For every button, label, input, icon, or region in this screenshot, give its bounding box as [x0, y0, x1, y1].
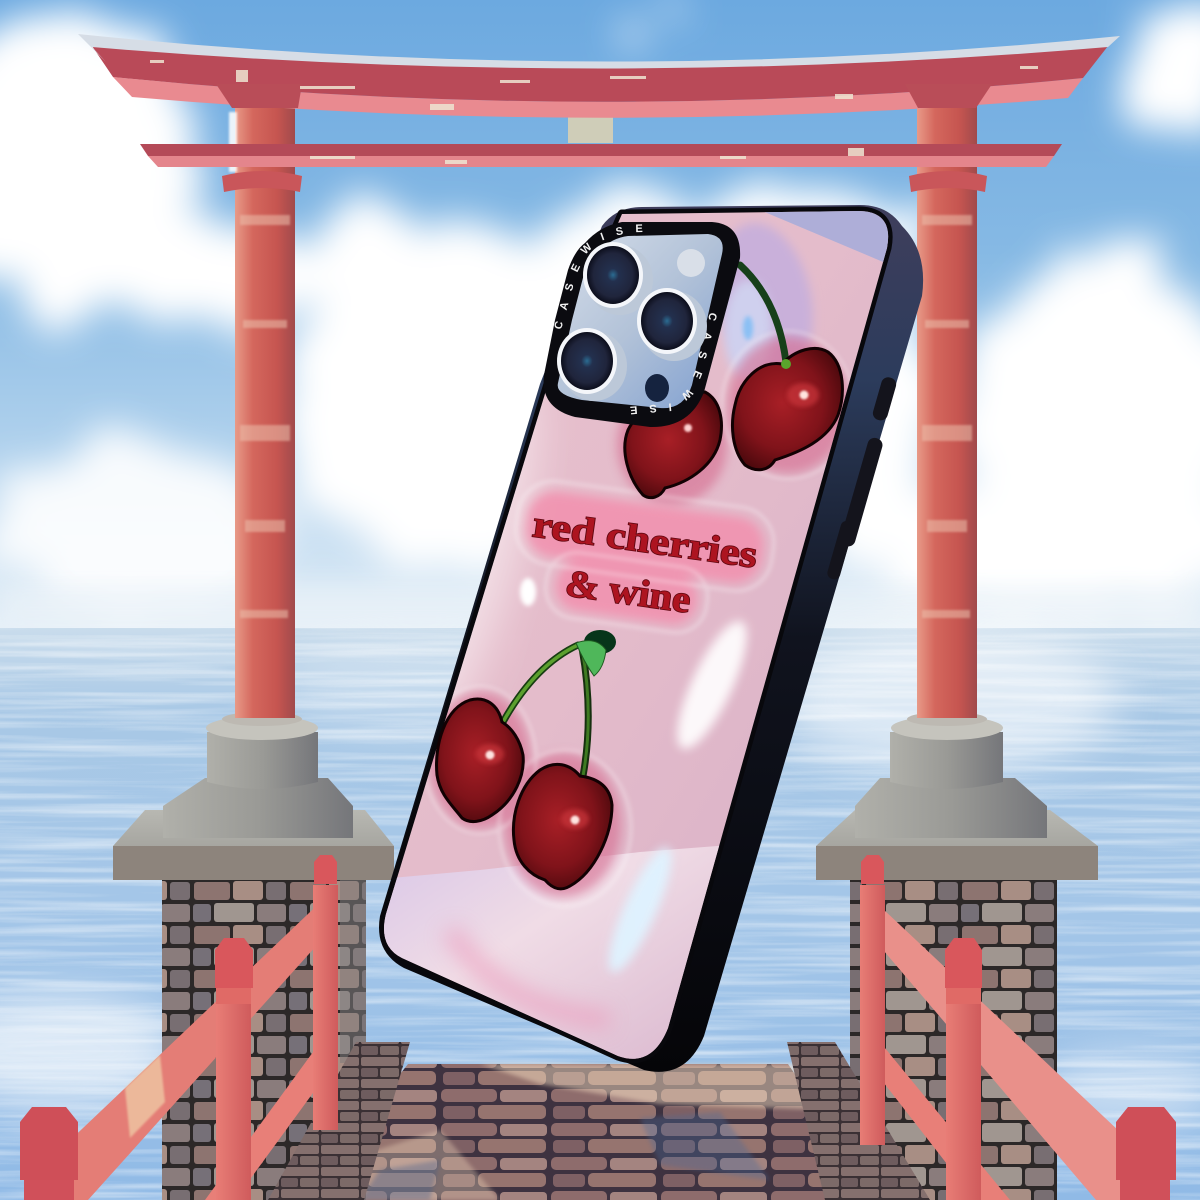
left pillar base: [113, 712, 394, 1200]
near post: [20, 1107, 78, 1200]
bridge right kerb: [787, 1042, 930, 1200]
near post: [1116, 1107, 1176, 1200]
case slogan: [530, 503, 760, 622]
sky: [0, 0, 1200, 630]
case slogan: red cherries: [530, 503, 760, 577]
centre strut: [568, 105, 613, 143]
leaf: [576, 630, 616, 676]
sensor: [645, 374, 669, 402]
beam collars: [216, 84, 302, 108]
sea: [0, 628, 1200, 1200]
phone case: [379, 205, 924, 1072]
cherry dome: [723, 221, 815, 362]
lower left cherry: [437, 699, 523, 822]
clouds: [0, 0, 1200, 633]
upper right cherry: [732, 348, 842, 470]
top beam: [78, 34, 1120, 118]
side buttons: [826, 376, 898, 581]
stone bridge path: [300, 1064, 880, 1200]
case face border: [384, 211, 888, 1059]
brand ring text: CASEWISE: [630, 313, 717, 414]
far post: [313, 855, 338, 1130]
brand ring text: [554, 224, 717, 414]
lower cherries: [437, 630, 616, 889]
left railing: [20, 855, 338, 1200]
brand ring text: CASEWISE: [554, 224, 642, 329]
stems: [503, 645, 588, 776]
lens plate: [558, 234, 723, 408]
far post: [860, 855, 885, 1145]
lens 1: [583, 242, 653, 315]
upper lilac corner: [765, 211, 888, 262]
lower right cherry: [513, 764, 612, 889]
right railing: [860, 855, 1176, 1200]
lower colour band: [384, 846, 720, 1059]
flash: [677, 249, 705, 277]
lens 2: [637, 288, 707, 361]
upper left cherry: [625, 392, 721, 498]
left pillar: [222, 100, 302, 718]
torii gate: [78, 34, 1120, 718]
cherry halos: [430, 337, 848, 897]
middle post: [215, 938, 253, 1200]
camera module: [544, 222, 740, 427]
right pillar: [909, 100, 987, 718]
text puddle: [511, 476, 778, 637]
bridge left kerb: [268, 1042, 410, 1200]
middle post: [945, 938, 982, 1200]
upper cherries: [625, 265, 842, 498]
lower beam: [140, 144, 1062, 167]
case slogan: & wine: [563, 562, 693, 622]
lens 3: [557, 328, 627, 401]
case bumper: [379, 205, 923, 1072]
gloss highlights: [672, 617, 752, 753]
module frame: [544, 222, 740, 427]
case face: [370, 200, 910, 1080]
upper stem: [740, 265, 786, 362]
paint flecks: [150, 60, 1038, 164]
right pillar base: [816, 712, 1098, 1200]
